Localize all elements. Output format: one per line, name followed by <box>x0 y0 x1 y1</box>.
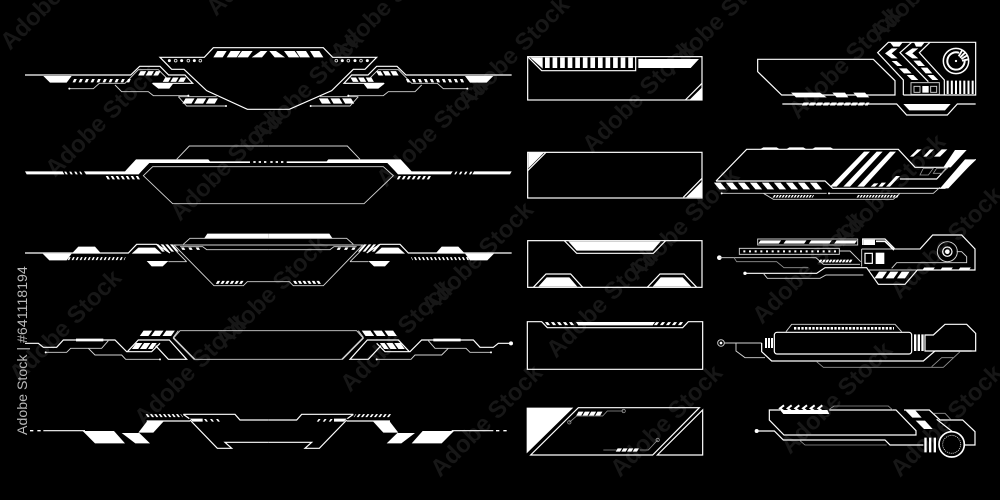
frame 2 left half <box>25 146 268 178</box>
watermark pattern: Adobe Stock <box>335 274 458 397</box>
watermark pattern: Adobe Stock <box>165 103 288 226</box>
circuit lines <box>717 235 975 284</box>
slanted frame lower lines <box>722 187 940 199</box>
watermark pattern: Adobe Stock <box>783 1 906 124</box>
chevrons <box>780 405 822 411</box>
dial <box>943 48 969 74</box>
watermark pattern: Adobe Stock <box>605 359 728 482</box>
stock id side text: Adobe Stock | #641118194 <box>15 266 31 435</box>
watermark pattern: Adobe Stock <box>40 59 163 182</box>
eye dial <box>937 242 957 262</box>
frame 5 left half <box>30 414 268 448</box>
watermark pattern: Adobe Stock <box>541 240 664 363</box>
box 4 <box>527 322 703 369</box>
frame 1 central outline <box>160 48 377 109</box>
frame 4 central outline <box>173 331 363 359</box>
gauge frame outline <box>758 59 895 95</box>
chevrons and stripes <box>885 42 938 80</box>
lower strips <box>791 93 951 110</box>
panel: wide frame 4 <box>25 331 513 448</box>
frame 1 right half <box>269 51 512 107</box>
watermark pattern: Adobe Stock <box>129 308 252 431</box>
frame 3 central outline <box>174 245 363 286</box>
watermark pattern: Adobe Stock <box>416 196 539 319</box>
slanted frame outline <box>716 149 947 181</box>
module rects <box>863 240 973 275</box>
frame 4 end dot <box>509 341 513 345</box>
box 5 <box>527 408 703 455</box>
watermark pattern: Adobe Stock <box>747 206 870 329</box>
panel: wheel frame <box>755 405 975 457</box>
watermark pattern: Adobe Stock <box>622 162 745 285</box>
box 2 <box>528 152 702 198</box>
vertical bars <box>947 67 974 107</box>
watermark pattern: Adobe Stock <box>246 25 369 148</box>
watermark pattern: Adobe Stock <box>775 336 898 459</box>
capsule frame <box>718 324 976 367</box>
frame 4 right half <box>342 331 512 360</box>
top bar with stripes <box>758 239 858 245</box>
slanted frame fills <box>717 147 976 196</box>
frame 2 right half <box>268 146 512 178</box>
watermark pattern: Adobe Stock <box>425 359 548 482</box>
frame 5 right half <box>268 414 507 448</box>
frame 1 left half <box>25 51 267 107</box>
parallelograms <box>905 410 922 418</box>
dotted bar <box>739 248 839 254</box>
watermark pattern: Adobe Stock <box>577 35 700 158</box>
box 1 <box>528 57 702 100</box>
wheel frame outline <box>769 410 916 435</box>
watermark pattern: Adobe Stock <box>4 264 127 387</box>
box 3 <box>528 241 702 287</box>
frame 2 central hexagon <box>143 167 393 204</box>
frame 3 left half <box>25 234 268 282</box>
watermark pattern: Adobe Stock <box>828 128 951 251</box>
panel: wide frame 2 <box>25 146 512 286</box>
watermark pattern: Adobe Stock <box>371 69 494 192</box>
panel: wide frame 1 <box>25 48 512 109</box>
wheel <box>939 432 964 457</box>
bars <box>924 423 937 467</box>
watermark pattern: Adobe Stock <box>210 230 333 353</box>
frame 4 left half <box>25 331 195 360</box>
panel: gauge frame <box>716 42 976 199</box>
panel: small boxes column <box>528 57 702 287</box>
indicator box <box>911 83 939 94</box>
panel: circuit frames <box>717 235 976 367</box>
frame 3 right half <box>268 234 512 282</box>
